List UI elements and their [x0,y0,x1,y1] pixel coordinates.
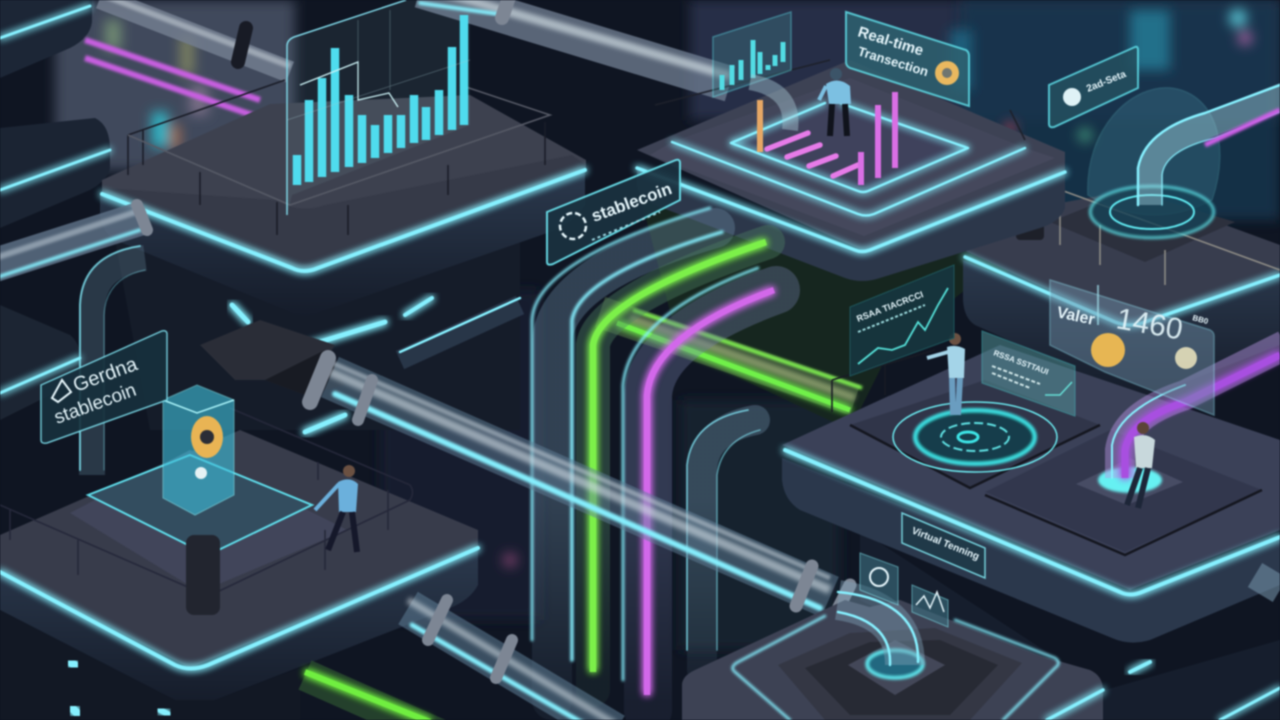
label: real-time transaction: Transection [856,44,930,79]
hologram: data card [982,331,1075,416]
label: stablecoin: stablecoin [589,179,674,226]
target rings [893,402,1057,472]
platform: top left [100,80,586,430]
glow edges [637,168,1065,252]
person [1127,422,1155,508]
label: value 1460 [1050,280,1214,415]
small clear pipe [687,410,760,670]
hologram: trend chart: RSAA TIACRCCI [855,289,925,324]
purple elbow [1120,345,1280,478]
platform: bottom centre [682,592,1103,720]
hologram: data card: RSSA SSTTAUI [992,348,1050,377]
top pipes [100,0,730,84]
left pipe and elbow [0,205,147,475]
railing [655,60,1025,140]
left edge platforms [0,0,110,420]
magenta background pipes [85,40,260,116]
connector block [200,320,345,395]
label: real-time transaction [846,12,969,106]
connector and mid glow [232,298,520,432]
glass cube with coin [163,385,234,515]
hologram: glass dome [1088,85,1280,238]
platform: top right [963,178,1280,395]
hologram: teal bar chart [287,0,470,215]
label: top right badge [1049,47,1138,127]
hologram: trend chart [850,265,954,376]
label: value 1460: BB0 [1191,313,1210,326]
post [186,535,220,615]
railing: top left [128,80,545,235]
elbow [838,600,905,665]
purple pipe [648,290,776,710]
right edge details [1130,575,1280,720]
small pedestal [1076,458,1183,505]
label: value 1460: 1460 [1114,302,1185,346]
green pipe [593,242,768,690]
label: real-time transaction: Real-time [856,24,925,60]
platform: top centre [637,60,1065,281]
hologram: small chart [713,12,791,97]
floor bars [767,133,858,176]
person [819,68,851,136]
big clear pipe [310,358,850,625]
pipe bundle: vertical to curve [532,208,776,710]
railing [0,408,412,605]
green diagonal pipe [600,310,862,410]
label: gerdna stablecoin: Gerdna [70,353,141,397]
green tinted underside of centre platform [640,195,1060,430]
elbow behind chart [750,82,790,130]
person [315,465,358,552]
bottom pipes [305,600,615,720]
person [927,333,965,415]
label: virtual tenning [902,513,985,578]
platform: bottom left [0,385,478,720]
left lower glows [70,662,168,714]
label: value 1460: Valer [1055,304,1096,329]
label: virtual tenning: Virtual Tenning [910,526,981,563]
railing [832,350,935,412]
label: stablecoin [547,160,680,265]
railing and post [985,178,1280,285]
cyan pipe [552,228,715,700]
label: top right badge: 2ad-Seta [1085,69,1128,95]
label: gerdna stablecoin [41,331,167,443]
small holograms above elbow [860,553,948,627]
platform: mid right [782,333,1280,720]
label: gerdna stablecoin: stablecoin [52,380,139,429]
